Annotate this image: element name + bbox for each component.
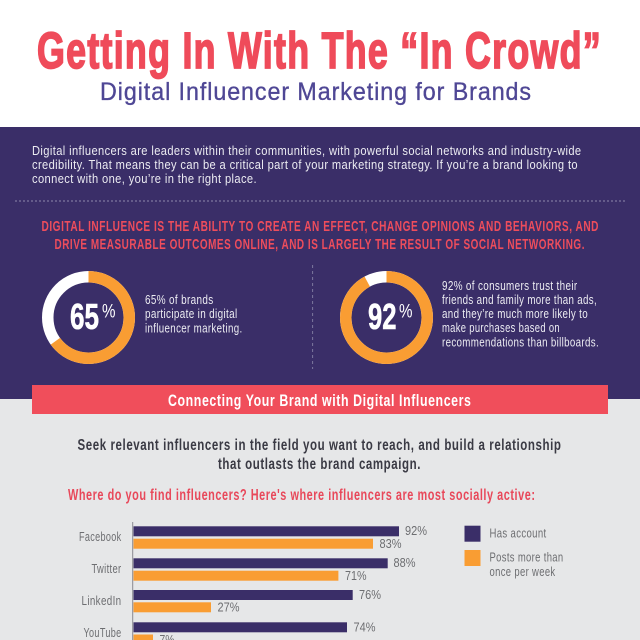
text: 92% of consumers <box>442 278 599 350</box>
panel: gray lower section <box>0 399 640 640</box>
donut chart: 92% <box>346 277 427 358</box>
intro text <box>32 143 582 186</box>
legend: once per week <box>490 565 556 579</box>
text: 65% of brands: 65% of brands <box>145 292 214 307</box>
donut chart: 65%: % <box>102 302 116 322</box>
legend <box>464 526 564 579</box>
text: 92% of consumers: and they’re much more likely to <box>442 306 588 321</box>
bar chart <box>79 522 427 640</box>
donut chart: 65% <box>48 277 129 358</box>
intro text: connect with one, you’re in the right place. <box>32 171 257 186</box>
bars: Twitter: Twitter <box>92 562 122 576</box>
bars: LinkedIn: 76% <box>359 588 381 602</box>
panel: purple intro <box>0 127 640 399</box>
bars: LinkedIn: 27% <box>218 601 240 615</box>
text: 65% of brands <box>145 292 242 336</box>
banner: Connecting Your Brand with Digital Influencers <box>168 391 472 410</box>
bars: LinkedIn <box>82 588 381 615</box>
bars: LinkedIn: LinkedIn <box>82 594 122 608</box>
lead statement: that outlasts the brand campaign. <box>218 456 421 473</box>
donut chart: 92%: % <box>399 302 413 322</box>
banner <box>32 385 608 414</box>
legend: Has account <box>490 526 547 540</box>
legend: Posts more than <box>490 551 564 565</box>
text: 92% of consumers: make purchases based on <box>442 320 560 335</box>
bars: Twitter <box>92 556 416 583</box>
bars: YouTube: 74% <box>354 621 376 635</box>
bars: Facebook: 92% <box>405 524 427 538</box>
bars: Twitter: 71% <box>345 569 366 583</box>
text: 65% of brands: influencer marketing. <box>145 320 242 336</box>
donut chart: 65%: 65 <box>70 296 99 337</box>
bars: YouTube: YouTube <box>84 626 122 640</box>
bars: YouTube <box>84 621 376 640</box>
red definition heading <box>42 218 599 253</box>
donut chart: 92%: 92 <box>368 296 396 337</box>
bars: Facebook: Facebook <box>79 530 122 544</box>
text: 65% of brands: participate in digital <box>145 306 238 321</box>
bars: Twitter: 88% <box>394 556 416 570</box>
lead statement <box>78 437 562 473</box>
text: 92% of consumers: 92% of consumers trust their <box>442 278 578 293</box>
bars: Facebook: 83% <box>380 537 402 551</box>
subtitle: Digital Influencer Marketing for Brands <box>100 78 532 106</box>
bars: Facebook <box>79 524 427 551</box>
